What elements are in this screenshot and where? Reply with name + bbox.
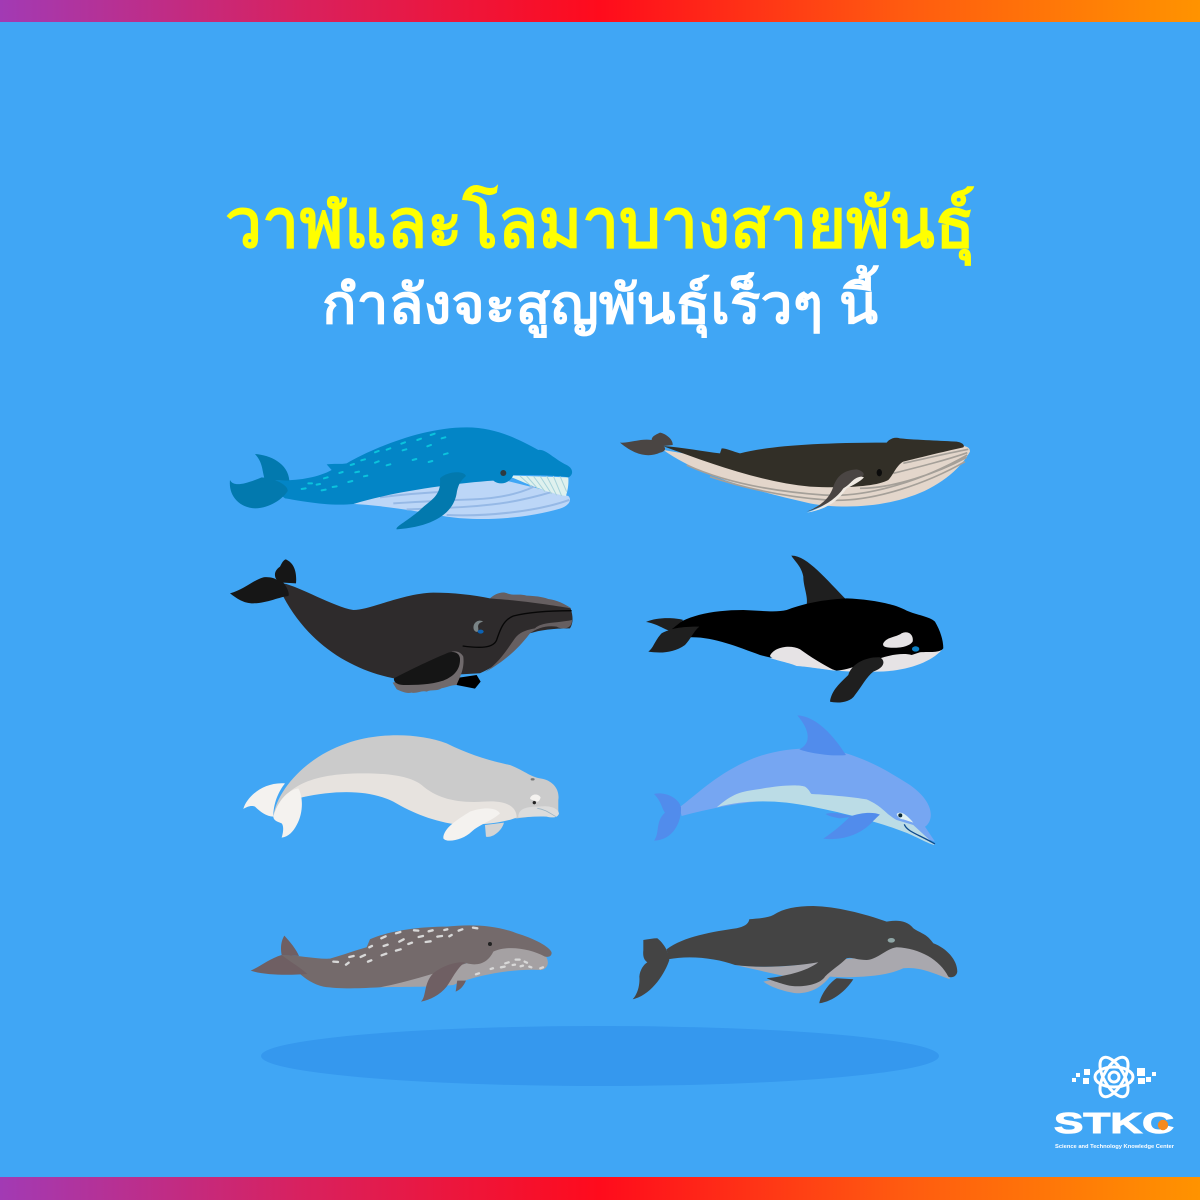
humpback whale (633, 906, 957, 1003)
baleen lines (520, 476, 567, 496)
logo wordmark: STKC (1054, 1108, 1174, 1140)
blue whale (230, 427, 572, 529)
fin whale (620, 433, 970, 513)
logo tagline: Science and Technology Knowledge Center (1055, 1144, 1175, 1150)
belly grooves (380, 483, 569, 515)
small flipper (455, 675, 481, 689)
eye (897, 813, 913, 823)
tail flukes (646, 618, 699, 653)
body (270, 427, 572, 505)
orca (646, 556, 943, 703)
flipper (823, 813, 880, 839)
back flipper (826, 813, 853, 818)
body (282, 925, 552, 988)
blowhole (531, 778, 535, 780)
belly (353, 478, 570, 519)
flipper (421, 962, 466, 1002)
eye (488, 942, 492, 946)
white belly (770, 650, 942, 672)
lower flipper (819, 978, 853, 1003)
dorsal fin (797, 715, 846, 755)
eye (473, 621, 483, 632)
logo atom icon (1094, 1053, 1134, 1101)
title: วาฬและโลมาบางสายพันธุ์ (225, 184, 975, 266)
white underside (273, 773, 517, 825)
right whale (230, 559, 573, 693)
eye (500, 470, 506, 476)
dorsal fin (791, 556, 847, 605)
callosities (485, 593, 572, 672)
eye (888, 938, 895, 943)
body (663, 438, 964, 487)
flipper (830, 657, 883, 703)
eye (530, 794, 541, 802)
body (283, 583, 573, 678)
body (273, 735, 559, 818)
flipper (807, 476, 864, 513)
tail fluke (633, 938, 669, 999)
eye (877, 469, 882, 476)
spots (302, 434, 448, 490)
mouth line (904, 824, 935, 844)
belly (717, 785, 935, 845)
belly (380, 946, 548, 987)
small flipper (485, 823, 504, 837)
eye patch (883, 632, 913, 648)
tail fluke (654, 793, 681, 841)
gray whale (251, 925, 552, 1002)
saddle patch (770, 647, 835, 671)
mouth line (463, 611, 572, 647)
body (670, 598, 943, 671)
body (667, 906, 957, 986)
top gradient bar (0, 0, 1200, 22)
belly grooves (687, 449, 968, 500)
tail flukes (251, 936, 307, 975)
mouth (537, 808, 556, 817)
flipper (443, 808, 500, 841)
flipper (396, 472, 466, 529)
logo dots (1072, 1068, 1156, 1084)
bottom gradient bar (0, 1177, 1200, 1200)
beluga (243, 735, 559, 841)
eye (912, 646, 919, 652)
dolphin (654, 715, 935, 845)
baleen (512, 476, 568, 496)
subtitle: กำลังจะสูญพันธุ์เร็วๆ นี้ (322, 265, 879, 339)
snout (518, 806, 559, 817)
spots (333, 928, 543, 974)
tail fluke (620, 433, 673, 455)
logo: STKC (1054, 1053, 1175, 1150)
tail flukes (243, 783, 302, 838)
belly (663, 446, 970, 506)
ground shadow (261, 1026, 939, 1086)
belly (735, 939, 950, 993)
tail fluke (230, 454, 289, 508)
logo orange dot (1158, 1120, 1168, 1130)
flipper (393, 651, 464, 693)
tail fluke (230, 559, 296, 603)
body (679, 748, 935, 842)
